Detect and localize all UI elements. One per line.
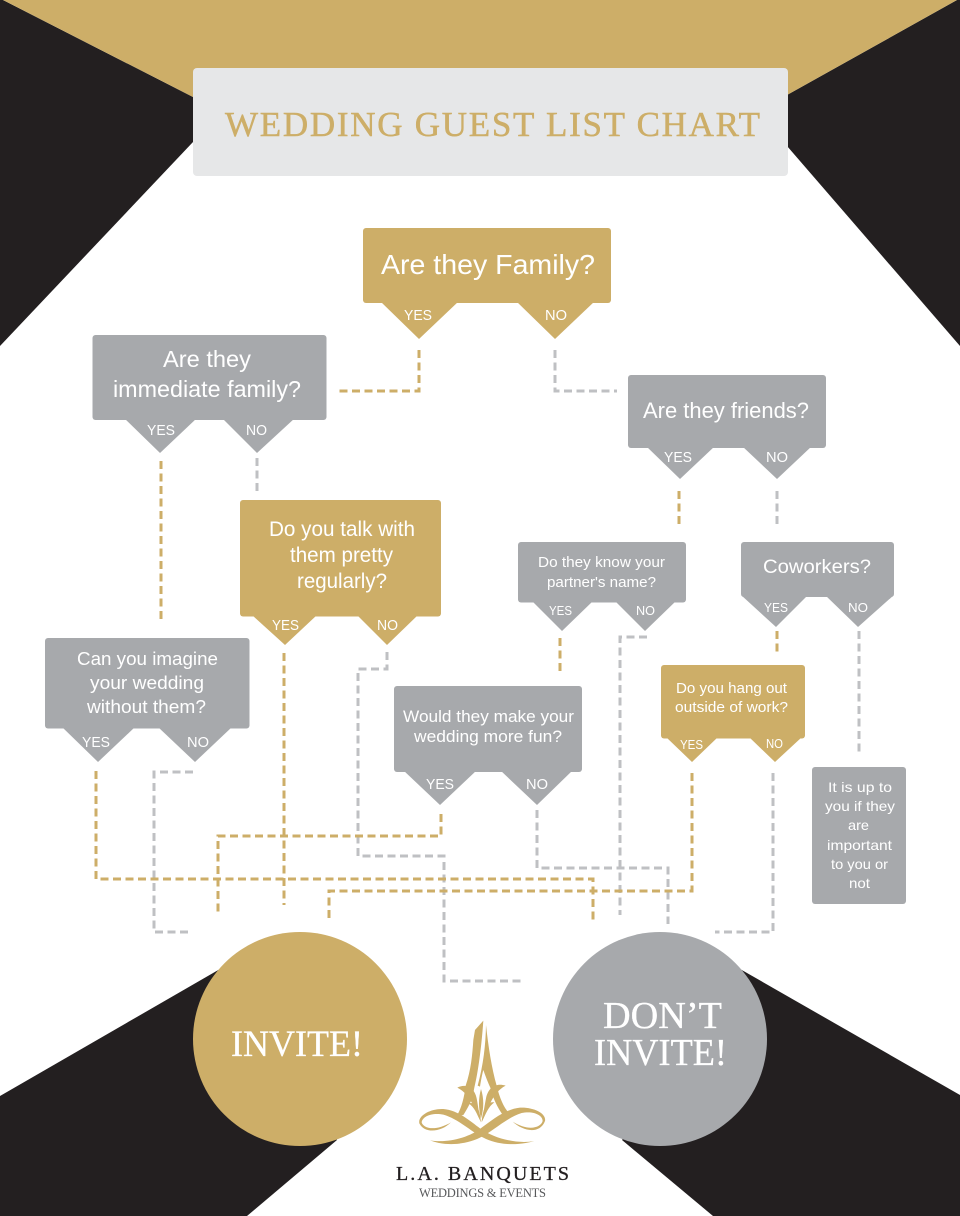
panel: would they make your wedding more fun bbox=[394, 686, 582, 805]
panel: would they make your wedding more fun: Would they make your bbox=[403, 707, 574, 726]
arrow: immediate family yes bbox=[160, 461, 162, 621]
panel: are they immediate family: Are they bbox=[163, 346, 252, 372]
panel: are they immediate family: YES bbox=[147, 422, 175, 439]
title bbox=[193, 68, 788, 176]
panel: are they family bbox=[363, 228, 611, 339]
panel: it is up to you: to you or bbox=[831, 856, 888, 872]
arrow: more fun yes to invite bbox=[218, 814, 441, 915]
title: WEDDING GUEST LIST CHART bbox=[225, 105, 760, 144]
arrow: imagine wedding yes to invite bbox=[96, 771, 593, 924]
panel: it is up to you: It is up to bbox=[828, 779, 892, 795]
panel: can you imagine your wedding without them: NO bbox=[187, 734, 209, 751]
arrow: talk regularly yes bbox=[282, 653, 286, 905]
panel: do you talk with them pretty regularly: YES bbox=[272, 617, 299, 634]
panel: coworkers bbox=[741, 542, 894, 627]
outcome: invite circle: INVITE! bbox=[231, 1024, 363, 1065]
panel: can you imagine your wedding without them bbox=[45, 638, 250, 762]
panel: can you imagine your wedding without them: without them? bbox=[86, 696, 206, 717]
panel: do they know your partner's name: YES bbox=[549, 603, 572, 618]
arrow: coworkers no bbox=[858, 631, 860, 752]
panel: do you hang out outside of work bbox=[661, 665, 805, 762]
panel: are they immediate family: immediate family? bbox=[113, 376, 301, 402]
panel: it is up to you bbox=[812, 767, 906, 904]
panel: coworkers: NO bbox=[848, 600, 868, 615]
panel: do you hang out outside of work: YES bbox=[680, 738, 703, 752]
background: top gold banner bbox=[3, 0, 957, 97]
panel: do you talk with them pretty regularly: regularly? bbox=[297, 570, 387, 593]
panel: can you imagine your wedding without them: your wedding bbox=[90, 672, 204, 693]
panel: are they family: Are they Family? bbox=[381, 249, 595, 280]
panel: are they friends: YES bbox=[664, 449, 692, 466]
arrow: imagine wedding no bbox=[154, 772, 193, 932]
panel: do they know your partner's name bbox=[518, 542, 686, 631]
panel: do they know your partner's name: Do they know your bbox=[538, 555, 665, 571]
panel: it is up to you: you if they bbox=[825, 798, 895, 814]
panel: are they family: YES bbox=[404, 307, 432, 324]
logo name: L.A. BANQUETS bbox=[396, 1163, 569, 1185]
background: bottom right black shape bbox=[622, 969, 960, 1216]
background: bottom left black shape bbox=[0, 969, 337, 1216]
arrow: friends yes bbox=[678, 491, 680, 527]
arrow: partner name yes bbox=[558, 638, 562, 673]
outcome: don't invite circle bbox=[553, 932, 767, 1146]
panel: coworkers: YES bbox=[764, 600, 788, 615]
outcome: don't invite circle: INVITE! bbox=[594, 1032, 727, 1074]
arrow: more fun no bbox=[537, 810, 668, 924]
panel: do you talk with them pretty regularly: NO bbox=[377, 617, 398, 634]
arrow: talk regularly no to don't invite bbox=[358, 652, 523, 981]
outcome: invite circle bbox=[193, 932, 407, 1146]
panel: coworkers: Coworkers? bbox=[763, 557, 871, 578]
panel: are they family: NO bbox=[545, 307, 567, 324]
panel: are they immediate family: NO bbox=[246, 422, 267, 439]
panel: do you talk with them pretty regularly: them pretty bbox=[290, 544, 393, 567]
arrow: immediate family no bbox=[256, 458, 258, 493]
background: top left black shape bbox=[0, 0, 193, 346]
panel: do you hang out outside of work: outside of work? bbox=[675, 700, 788, 716]
panel: do you hang out outside of work: Do you hang out bbox=[676, 681, 787, 697]
arrow: friends no bbox=[776, 491, 778, 527]
arrow: hang out no bbox=[715, 773, 773, 932]
arrow: hang out yes to invite bbox=[329, 773, 692, 920]
panel: are they immediate family bbox=[92, 335, 326, 453]
panel: do they know your partner's name: partner's name? bbox=[547, 575, 656, 591]
logo tagline: WEDDINGS & EVENTS bbox=[419, 1186, 546, 1200]
arrow: coworkers yes bbox=[776, 631, 778, 656]
arrow: family yes to immediate family bbox=[338, 350, 419, 391]
panel: it is up to you: not bbox=[849, 875, 870, 891]
panel: it is up to you: important bbox=[827, 837, 892, 853]
panel: are they friends: Are they friends? bbox=[643, 398, 809, 423]
icon: tower and flourish emblem bbox=[419, 1021, 545, 1144]
panel: do you talk with them pretty regularly bbox=[240, 500, 441, 645]
panel: can you imagine your wedding without them: Can you imagine bbox=[77, 648, 218, 669]
panel: do you talk with them pretty regularly: Do you talk with bbox=[269, 518, 415, 541]
panel: are they friends bbox=[628, 375, 826, 479]
arrow: family no to friends bbox=[555, 350, 617, 391]
panel: it is up to you: are bbox=[848, 817, 869, 833]
panel: are they friends: NO bbox=[766, 449, 788, 466]
arrow: partner name no bbox=[620, 637, 647, 915]
panel: would they make your wedding more fun: wedding more fun? bbox=[413, 727, 562, 746]
panel: would they make your wedding more fun: YES bbox=[426, 776, 454, 793]
outcome: don't invite circle: DON’T bbox=[603, 995, 722, 1037]
panel: do you hang out outside of work: NO bbox=[766, 737, 783, 751]
panel: would they make your wedding more fun: NO bbox=[526, 776, 548, 793]
background: top right black shape bbox=[787, 0, 960, 346]
panel: do they know your partner's name: NO bbox=[636, 603, 655, 618]
logo: L.A. Banquets bbox=[396, 1021, 569, 1200]
panel: can you imagine your wedding without them: YES bbox=[82, 734, 110, 751]
